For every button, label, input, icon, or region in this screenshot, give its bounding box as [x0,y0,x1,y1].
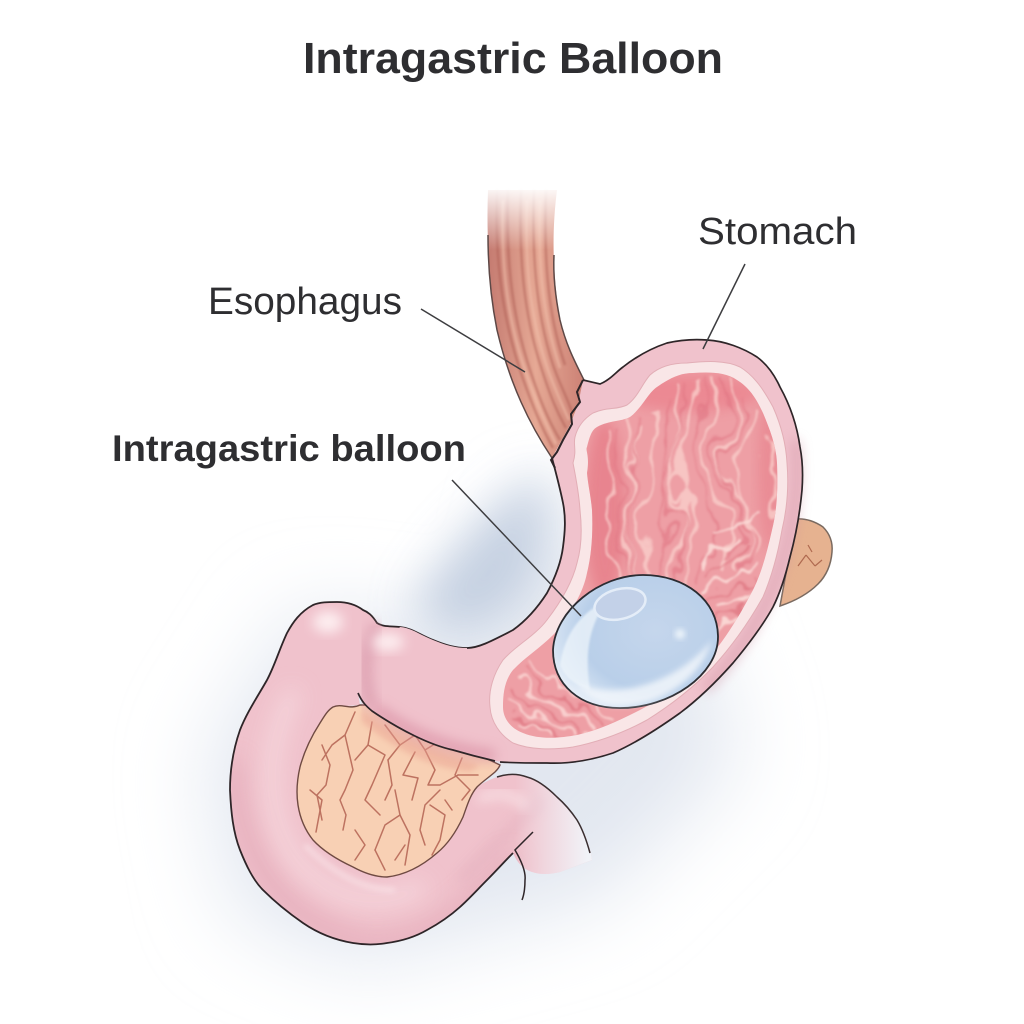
label: Stomach: Stomach [698,211,857,253]
stomach [358,340,803,763]
label: Intragastric balloon: Intragastric balloon [112,428,466,469]
stomach outline: lesser curvature [467,458,565,648]
gastroesophageal junction [551,380,583,468]
stomach cavity with folds [503,372,778,738]
pale rim [490,362,788,749]
leader line: Esophagus [421,309,525,372]
wall shading [705,440,797,690]
title: Intragastric Balloon [303,34,723,83]
pylorus underside shading [375,708,495,756]
esophagus [480,185,584,458]
stomach outer wall [358,340,803,763]
highlight on antrum [372,633,404,651]
pancreas [297,705,500,877]
duodenum [230,602,600,945]
leader line: Intragastric balloon [452,480,581,616]
intragastric balloon [553,575,718,708]
stomach outline: greater curvature and pylorus underside [358,340,803,763]
pylorus groove shading [365,626,378,708]
leader line: Stomach [703,264,745,349]
label: Esophagus: Esophagus [208,281,402,323]
soft blue shadow behind organs [205,470,740,965]
spleen [780,519,832,606]
